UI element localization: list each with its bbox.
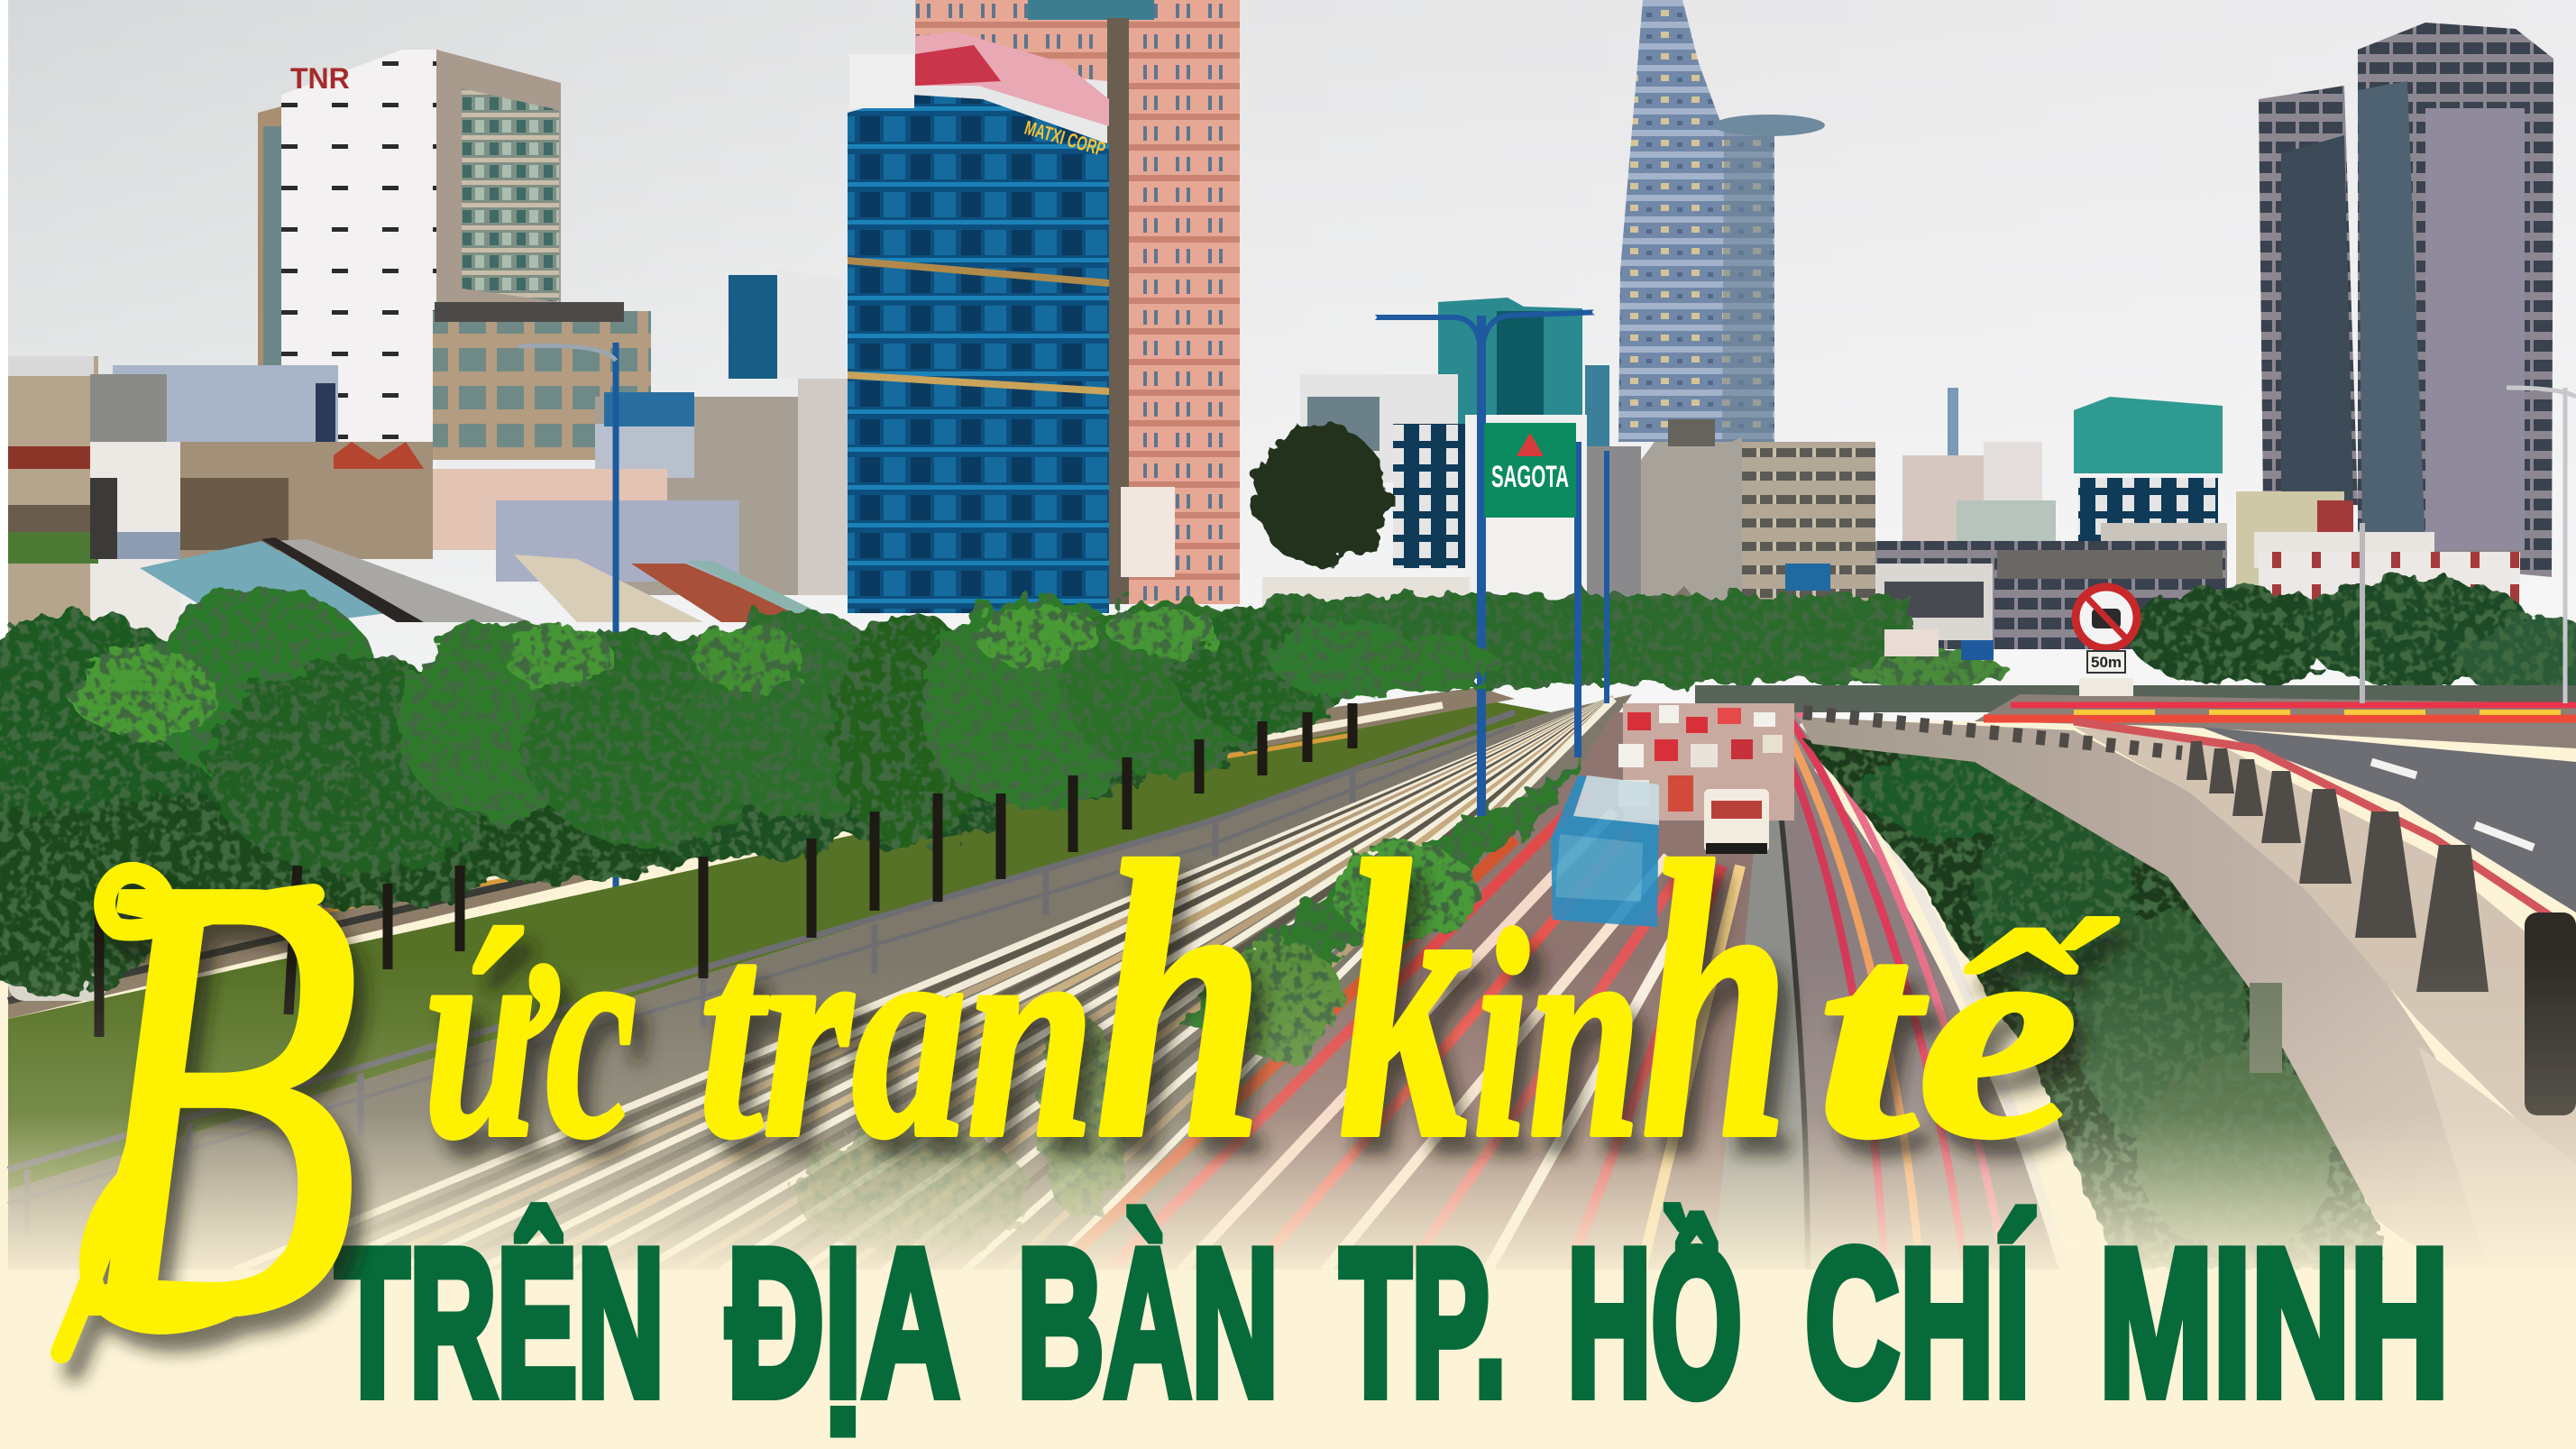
brown mid-rise building bbox=[433, 302, 651, 460]
blue bus bbox=[1551, 775, 1659, 927]
Bitexco tower bbox=[1618, 0, 1825, 442]
old office block bbox=[1641, 419, 1875, 631]
roadside tree canopy bbox=[0, 586, 1497, 992]
centre lanes with red light trails bbox=[1082, 712, 1835, 1270]
title: green block line bbox=[335, 1206, 2449, 1440]
bridge pier bbox=[2250, 983, 2282, 1073]
twin towers under construction bbox=[2259, 23, 2553, 577]
tree trunks bbox=[99, 703, 1352, 1037]
SAGOTA billboard bbox=[1484, 423, 1576, 518]
right curved lanes with red trails bbox=[1758, 712, 2065, 1270]
background trees and lawns on the right bbox=[1262, 575, 2576, 712]
roadside grass bbox=[8, 699, 1551, 1190]
capital B: B bbox=[72, 742, 362, 1449]
street lamp on left bbox=[518, 343, 616, 902]
word: tế: tế bbox=[1817, 870, 2122, 1199]
flyover side wall bbox=[1799, 717, 2502, 1270]
no-entry road sign bbox=[1884, 587, 2137, 696]
sign: MATXI CORP: MATXI CORP bbox=[1022, 116, 1108, 160]
word: CHÍ: CHÍ bbox=[1805, 1206, 2033, 1440]
far service road with cars bbox=[8, 687, 1515, 1019]
street lamps and sign poles bbox=[1355, 307, 2576, 816]
small blue and white building bbox=[729, 269, 846, 379]
left page margin bbox=[0, 0, 8, 1271]
pitched roofs bbox=[140, 537, 820, 631]
white tower with TNR sign bbox=[258, 50, 561, 469]
left highway with light trails bbox=[8, 694, 1632, 1270]
white and glass buildings left of billboard bbox=[1262, 374, 1641, 631]
traffic light trails on far ramp bbox=[1975, 694, 2576, 748]
word: TP.: TP. bbox=[1340, 1206, 1507, 1440]
fade into cream at the bottom bbox=[8, 956, 2576, 1271]
guard rail bbox=[8, 712, 1515, 1235]
sign text: 50m bbox=[2091, 654, 2122, 671]
word: kinh: kinh bbox=[1339, 782, 1790, 1221]
white van bbox=[1704, 789, 1769, 854]
flourish of the capital B bbox=[61, 873, 314, 1353]
rest of first word: ức bbox=[424, 870, 637, 1199]
flyover bridge posts bbox=[1803, 712, 2576, 1115]
teal buildings behind bbox=[1438, 298, 1609, 446]
word: TRÊN: TRÊN bbox=[335, 1206, 665, 1440]
colonial buildings and white block bbox=[1875, 491, 2520, 649]
dark tree bbox=[1253, 426, 1389, 566]
distant buildings bbox=[1902, 388, 2227, 559]
word: ĐỊA: ĐỊA bbox=[727, 1206, 959, 1440]
word: tranh: tranh bbox=[699, 782, 1265, 1221]
blue glass tower bbox=[848, 32, 1109, 613]
word: BÀN: BÀN bbox=[1017, 1206, 1279, 1440]
pink tower bbox=[915, 0, 1240, 604]
foliage under the bridge bbox=[1803, 739, 2380, 1270]
traffic jam bbox=[1551, 703, 1794, 927]
flyover ledge bbox=[2074, 727, 2576, 1172]
red rail bbox=[2074, 721, 2576, 933]
flyover outer wall lower bbox=[2418, 1046, 2576, 1270]
lane markings bbox=[2371, 762, 2534, 848]
cream band below photo bbox=[0, 1270, 2576, 1449]
sign: TNR: TNR bbox=[290, 62, 350, 95]
flyover deck bbox=[2200, 727, 2576, 913]
word: HỒ: HỒ bbox=[1567, 1206, 1742, 1440]
centre median bushes bbox=[793, 757, 1587, 1262]
low-rise shop houses bbox=[8, 356, 848, 667]
title: script line in yellow bbox=[61, 742, 2122, 1449]
billboard text: SAGOTA bbox=[1491, 460, 1569, 494]
sky bbox=[8, 0, 2576, 721]
